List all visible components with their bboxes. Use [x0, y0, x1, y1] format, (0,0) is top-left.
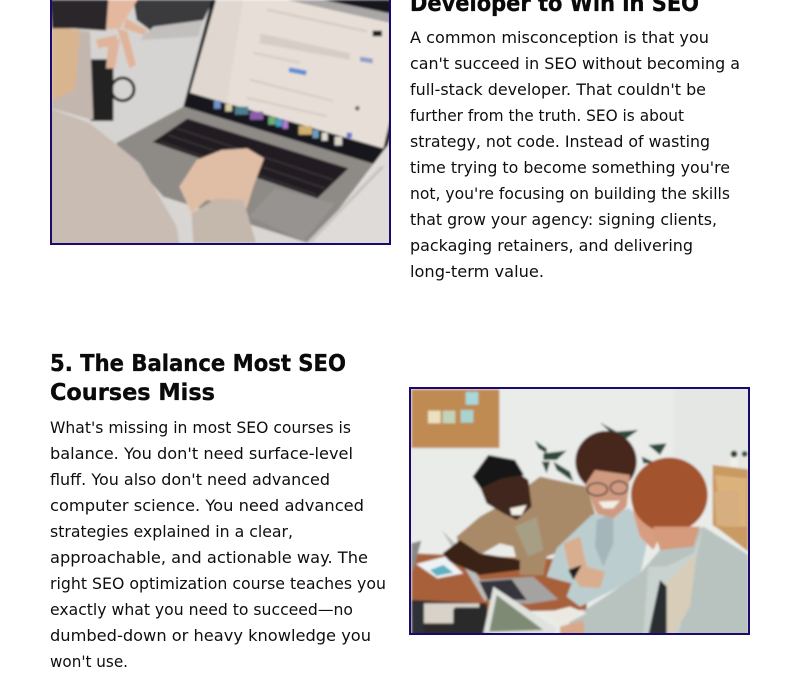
text block: section 5 paragraph: fluff. You also don't need advanced	[50, 470, 330, 489]
text block: section 5 paragraph	[50, 418, 386, 671]
text block: section 4 paragraph: packaging retainers, and delivering	[410, 236, 693, 255]
text block: section 5 paragraph: approachable, and actionable way. The	[50, 548, 368, 567]
heading: section 5	[50, 351, 346, 406]
text block: section 4 paragraph: further from the truth. SEO is about	[410, 106, 684, 125]
text block: section 4 paragraph: can't succeed in SEO without becoming a	[410, 54, 740, 73]
text block: section 4 paragraph: strategy, not code. Instead of wasting	[410, 132, 710, 151]
image: three colleagues laughing at a table	[408, 387, 752, 637]
text block: section 5 paragraph: right SEO optimization course teaches you	[50, 574, 386, 593]
text block: section 4 paragraph: time trying to become something you're	[410, 158, 730, 177]
text block: section 4 paragraph	[410, 28, 740, 281]
text block: section 4 paragraph: not, you're focusing on building the skills	[410, 184, 730, 203]
text block: section 5 paragraph: What's missing in most SEO courses is	[50, 418, 351, 437]
text block: section 4 paragraph: that grow your agency: signing clients,	[410, 210, 717, 229]
text block: section 5 paragraph: exactly what you need to succeed—no	[50, 600, 353, 619]
text block: section 5 paragraph: computer science. You need advanced	[50, 496, 364, 515]
text block: section 5 paragraph: balance. You don't need surface-level	[50, 444, 353, 463]
heading: section 5: 5. The Balance Most SEO	[50, 351, 346, 377]
image: person typing on a laptop	[50, 0, 393, 247]
heading: section 5: Courses Miss	[50, 380, 215, 406]
text block: section 5 paragraph: won't use.	[50, 652, 128, 671]
text block: section 5 paragraph: strategies explained in a clear,	[50, 522, 293, 541]
text block: section 5 paragraph: dumbed-down or heavy knowledge you	[50, 626, 371, 645]
text block: section 4 paragraph: long-term value.	[410, 262, 544, 281]
text block: section 4 paragraph: A common misconception is that you	[410, 28, 709, 47]
text block: section 4 paragraph: full-stack developer. That couldn't be	[410, 80, 706, 99]
